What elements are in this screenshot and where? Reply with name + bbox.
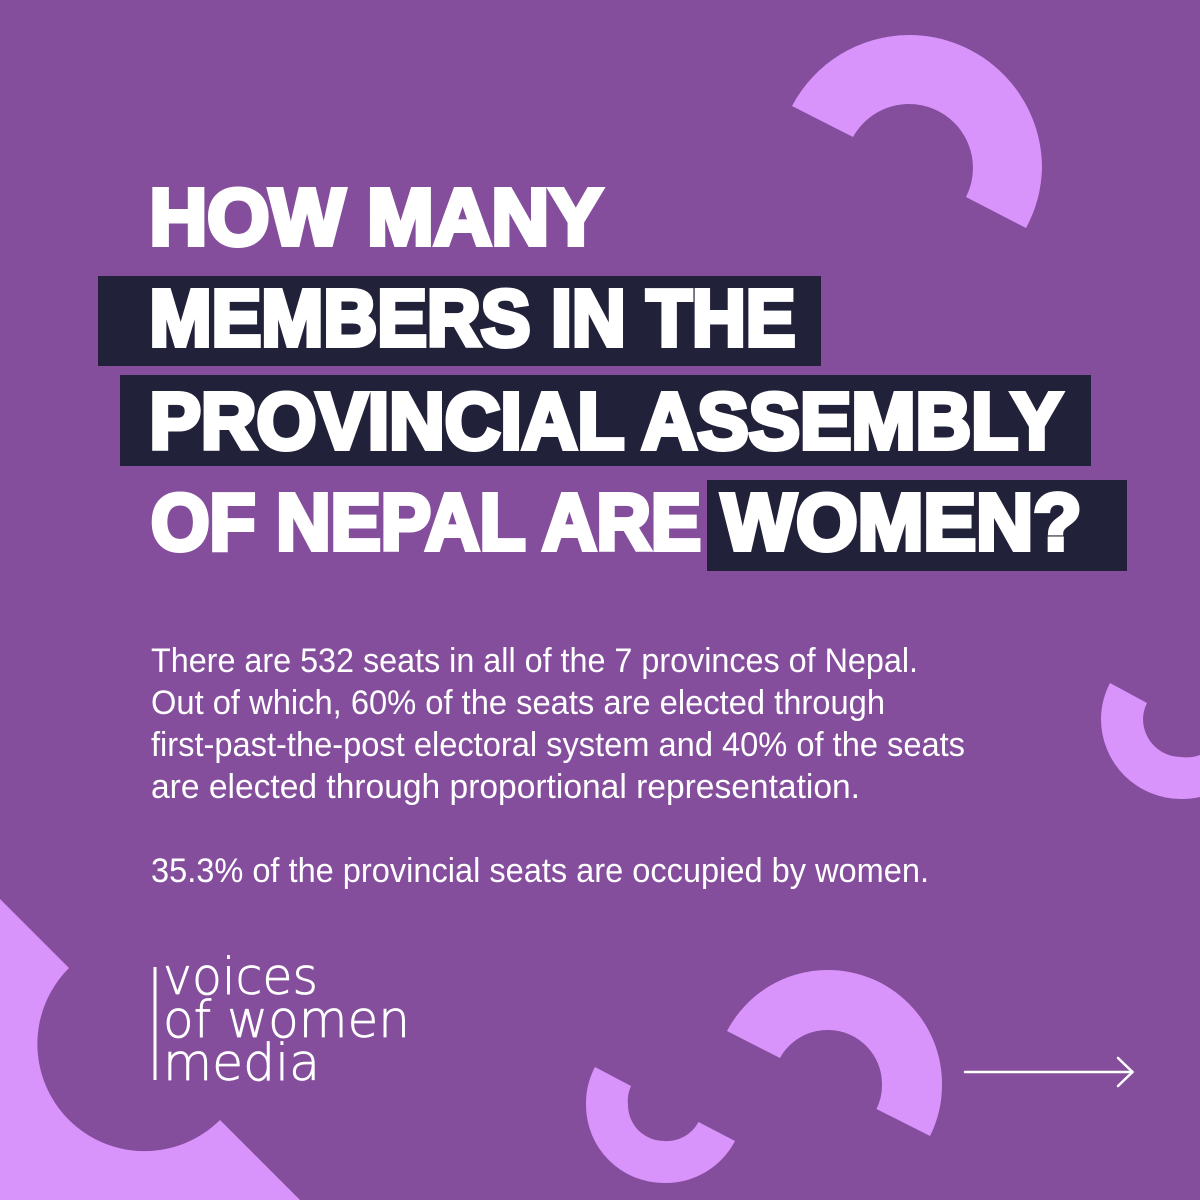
paragraph: share of women: 35.3% of the provincial seats are occupied by women. [151, 852, 929, 890]
title line 2: MEMBERS IN THE [150, 274, 796, 362]
paragraph: seat breakdown: first-past-the-post electoral system and 40% of the seats [151, 726, 965, 764]
title word: women: WOMEN? [722, 478, 1082, 566]
paragraph: seat breakdown: Out of which, 60% of the seats are elected through [151, 684, 885, 722]
title highlight box: women [707, 480, 1127, 571]
arrow [965, 1058, 1132, 1086]
decorative arc: bottom centre small [586, 1067, 735, 1183]
decorative shape: bottom left corner [0, 899, 300, 1200]
title highlight box: line 2 [98, 276, 821, 366]
paragraph: seat breakdown: There are 532 seats in all of the 7 provinces of Nepal. [151, 642, 918, 680]
paragraph: seat breakdown: are elected through proportional representation. [151, 768, 860, 806]
logo: voices of women media: media [163, 1034, 320, 1093]
body text [151, 642, 965, 890]
paragraph: seat breakdown [151, 642, 965, 806]
decorative arc: top right [792, 35, 1042, 228]
decorative arc: right edge [1101, 683, 1200, 799]
title [98, 172, 1127, 571]
decorative arc: bottom centre large [727, 970, 942, 1136]
title line 3: PROVINCIAL ASSEMBLY [150, 376, 1062, 466]
title line 4: OF NEPAL ARE [151, 478, 701, 566]
title highlight box: line 3 [120, 375, 1091, 466]
logo: voices of women media: voices [163, 948, 318, 1007]
logo: voices of women media: of women [163, 991, 410, 1050]
logo: voices of women media [154, 948, 410, 1093]
title line 1: HOW MANY [150, 172, 602, 262]
